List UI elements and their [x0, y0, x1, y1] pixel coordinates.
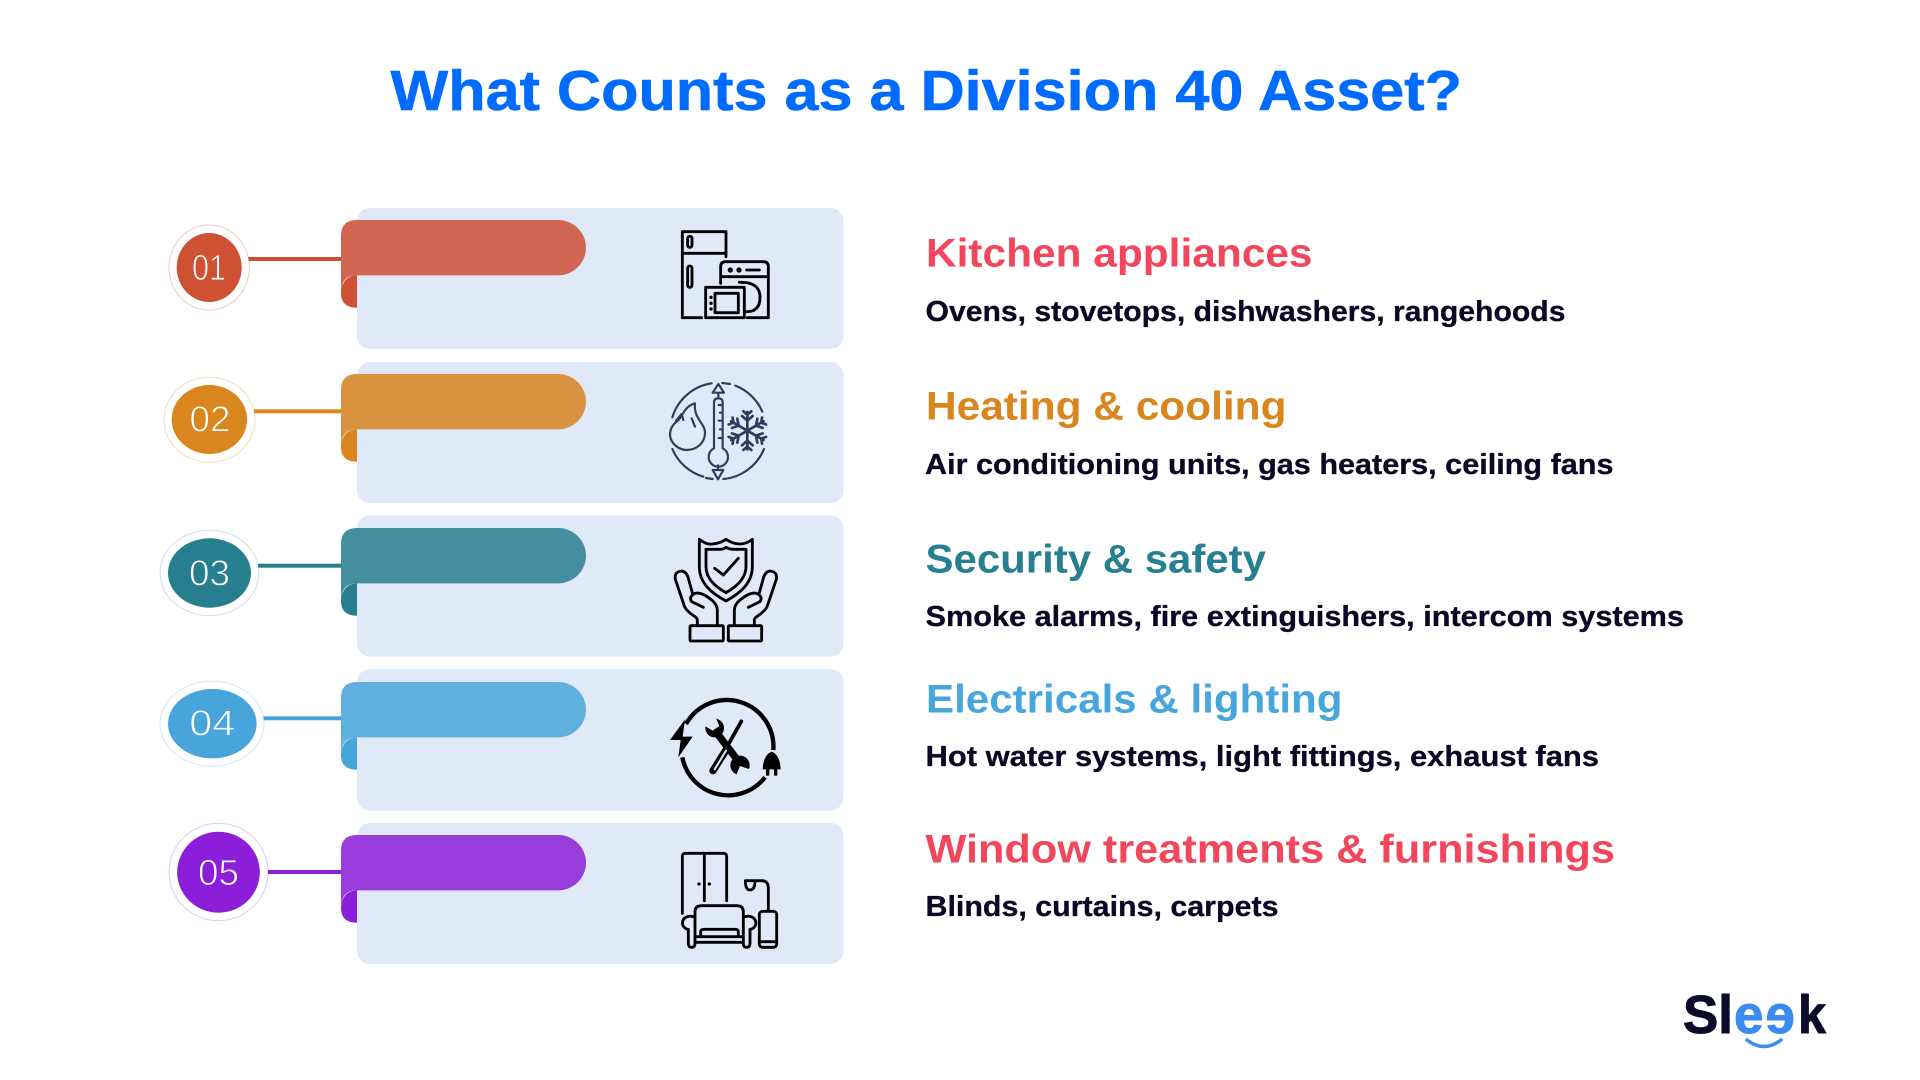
logo: Sleek: e — [1766, 985, 1795, 1045]
logo: Sleek: e — [1734, 985, 1764, 1045]
icon: heating and cooling — [670, 383, 767, 479]
heading 4: Electricals & lighting — [926, 678, 1342, 722]
description 3: Smoke alarms, fire extinguishers, intercom systems — [926, 601, 1684, 633]
title: What Counts as a Division 40 Asset? — [390, 59, 1462, 123]
description 2: Air conditioning units, gas heaters, ceiling fans — [925, 449, 1614, 481]
number badge 02 — [164, 377, 255, 462]
number badge 05 — [169, 823, 268, 921]
connector line 03 — [258, 564, 345, 568]
logo: Sleek: k — [1798, 985, 1827, 1045]
ribbon 02 — [341, 374, 586, 462]
logo: Sleek — [1683, 985, 1827, 1046]
number badge 05: 05 — [198, 852, 239, 893]
text block: electricals and lighting — [926, 678, 1599, 773]
text block: kitchen appliances — [926, 232, 1566, 328]
row 03: security and safety graphic — [160, 516, 844, 656]
connector line 02 — [254, 409, 345, 413]
number badge 04 — [160, 681, 264, 766]
ribbon 04 — [341, 682, 586, 770]
description 1: Ovens, stovetops, dishwashers, rangehoods — [926, 296, 1566, 328]
number badge 03: 03 — [189, 552, 230, 594]
number badge 01 — [169, 225, 249, 310]
connector line 01 — [245, 257, 345, 261]
panel 02 — [357, 362, 844, 503]
connector line 05 — [267, 870, 345, 874]
heading 1: Kitchen appliances — [926, 232, 1312, 276]
ribbon 03 — [341, 528, 586, 616]
number badge 04: 04 — [189, 702, 235, 744]
panel 03 — [357, 516, 844, 656]
logo: Sleek: Sl — [1683, 985, 1733, 1045]
row 05: window treatments and furnishings graphic — [169, 823, 844, 964]
text block: window treatments and furnishings — [926, 828, 1615, 923]
ribbon 05 — [341, 835, 586, 923]
icon: electrical tools — [670, 700, 781, 795]
number badge 01: 01 — [192, 247, 226, 288]
row 02: heating and cooling graphic — [164, 362, 844, 503]
icon: furniture — [682, 853, 777, 947]
panel 05 — [357, 823, 844, 964]
panel 01 — [357, 208, 844, 349]
number badge 02: 02 — [190, 398, 230, 440]
panel 04 — [357, 669, 844, 810]
description 5: Blinds, curtains, carpets — [926, 891, 1278, 923]
icon: kitchen appliances — [682, 232, 768, 318]
row 04: electricals and lighting graphic — [160, 669, 844, 810]
text block: security and safety — [926, 538, 1684, 633]
text block: heating and cooling — [925, 384, 1614, 481]
heading 3: Security & safety — [926, 538, 1267, 582]
heading 2: Heating & cooling — [926, 384, 1286, 428]
number badge 03 — [160, 530, 259, 616]
icon: security shield and hands — [675, 539, 777, 641]
ribbon 01 — [341, 220, 586, 308]
heading 5: Window treatments & furnishings — [926, 828, 1615, 872]
description 4: Hot water systems, light fittings, exhaust fans — [926, 741, 1599, 773]
row 01: kitchen appliances graphic — [169, 208, 844, 349]
connector line 04 — [263, 716, 345, 720]
